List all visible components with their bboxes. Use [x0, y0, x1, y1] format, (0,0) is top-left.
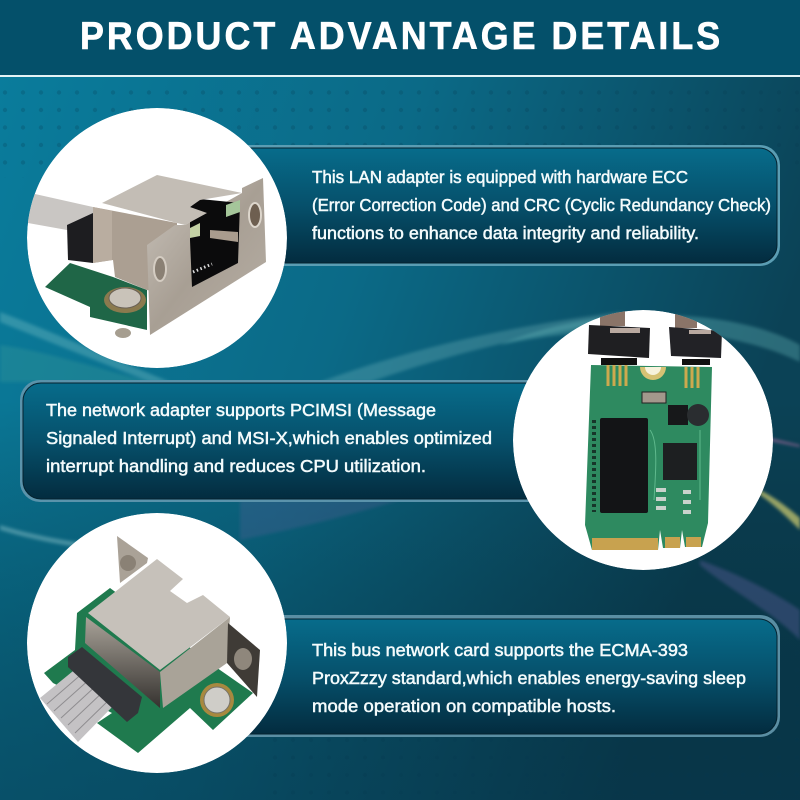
- panel 2: PCI MSI: [20, 380, 583, 502]
- panel 2 text: [46, 400, 492, 476]
- panel 1 text: This LAN adapter is equipped with hardware ECC: [312, 167, 688, 187]
- panel 2 text: Signaled Interrupt) and MSI-X,which enables optimized: [46, 428, 492, 448]
- panel 1 text: (Error Correction Code) and CRC (Cyclic Redundancy Check): [312, 195, 771, 215]
- panel 1: ECC and CRC: [200, 145, 780, 266]
- panel 3 text: [312, 640, 746, 716]
- panel 2 text: The network adapter supports PCIMSI (Message: [46, 400, 436, 420]
- panel 2 text: interrupt handling and reduces CPU utilization.: [46, 456, 426, 476]
- title banner: [0, 0, 800, 77]
- panel 3 text: This bus network card supports the ECMA-393: [312, 640, 688, 660]
- photo circle: RJ45 port front view: [27, 108, 287, 368]
- title: PRODUCT ADVANTAGE DETAILS: [80, 14, 720, 57]
- panel 3 text: ProxZzzy standard,which enables energy-saving sleep: [312, 668, 746, 688]
- panel 1 text: functions to enhance data integrity and reliability.: [312, 223, 699, 243]
- panel 3: ProxZzzy: [200, 615, 780, 737]
- panel 3 text: mode operation on compatible hosts.: [312, 696, 616, 716]
- photo circle: RJ45 module top view: [27, 513, 287, 773]
- panel 1 text: [312, 167, 771, 243]
- photo circle: M.2 adapter board: [513, 310, 773, 570]
